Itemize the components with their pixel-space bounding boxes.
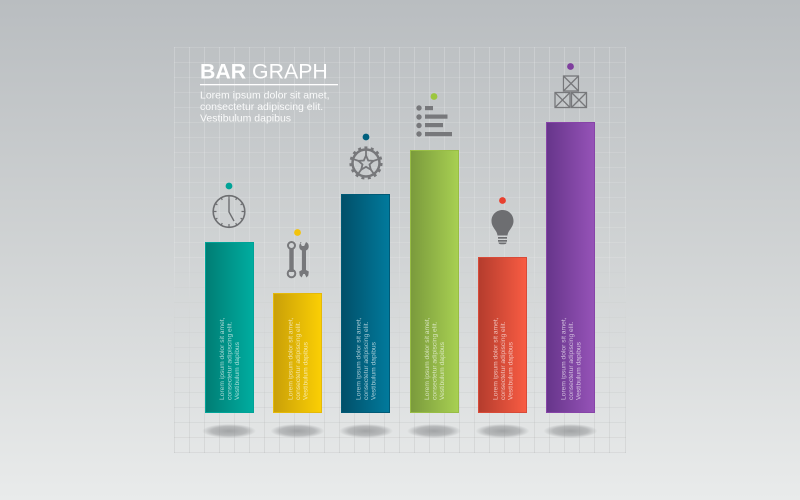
bar text <box>424 317 446 400</box>
bar text: Lorem ipsum dolor sit amet, <box>219 317 226 400</box>
shadow <box>270 424 324 438</box>
bar <box>274 294 322 412</box>
bar text <box>288 317 310 400</box>
heading: BAR GRAPH <box>200 60 328 84</box>
title block <box>200 60 338 124</box>
bar text: Lorem ipsum dolor sit amet, <box>424 317 431 400</box>
bar text: Lorem ipsum dolor sit amet, <box>288 317 294 400</box>
bar text: Lorem ipsum dolor sit amet, <box>492 317 500 400</box>
bar text: Vestibulum dapibus <box>576 341 583 400</box>
marker dot <box>499 197 506 204</box>
bar <box>410 150 458 412</box>
marker dot <box>294 229 301 236</box>
bar 2: yellow with wrenches <box>270 229 324 438</box>
marker dot <box>431 93 437 100</box>
icon: clock <box>213 196 245 227</box>
bar 6: purple with crates <box>544 63 598 438</box>
shadow <box>544 424 598 438</box>
shadow <box>202 424 256 438</box>
marker dot <box>226 183 232 189</box>
bar text <box>492 317 515 400</box>
marker dot <box>567 63 574 70</box>
shadow <box>407 424 461 438</box>
bar text: Vestibulum dapibus <box>234 341 241 400</box>
bar text: Vestibulum dapibus <box>439 341 446 400</box>
icon: light bulb <box>492 210 514 244</box>
bar text: Lorem ipsum dolor sit amet, <box>560 317 568 400</box>
icon: gear <box>351 148 381 178</box>
bar text <box>560 317 583 400</box>
bar <box>342 194 390 412</box>
bar 5: red with light bulb <box>476 197 530 438</box>
bar text: Lorem ipsum dolor sit amet, <box>356 317 362 400</box>
shadow <box>476 424 530 438</box>
intro text: consectetur adipiscing elit. <box>200 101 323 113</box>
bar text <box>356 317 378 400</box>
intro text: Vestibulum dapibus <box>200 112 291 124</box>
bar text: consectetur adipiscing elit. <box>363 321 370 400</box>
bar 3: dark blue with gear <box>339 134 393 438</box>
bar text: Vestibulum dapibus <box>508 341 515 400</box>
bar 4: green with list <box>407 93 461 438</box>
bar text: Vestibulum dapibus <box>371 341 378 400</box>
bar text: consectetur adipiscing elit. <box>432 321 439 400</box>
bar <box>478 258 526 412</box>
bar <box>206 242 254 412</box>
icon: wrenches <box>288 242 309 278</box>
bar 1: teal with clock <box>202 183 256 438</box>
bar text <box>219 317 241 400</box>
icon: list <box>416 105 452 137</box>
icon: crates <box>555 76 586 108</box>
marker dot <box>363 134 369 140</box>
bar text: consectetur adipiscing elit. <box>295 321 302 400</box>
bar <box>546 122 594 412</box>
bar text: consectetur adipiscing elit. <box>500 321 507 400</box>
intro text: Lorem ipsum dolor sit amet, <box>200 90 330 102</box>
bar text: Vestibulum dapibus <box>303 341 310 400</box>
shadow <box>339 424 393 438</box>
bar text: consectetur adipiscing elit. <box>568 321 575 400</box>
bar text: consectetur adipiscing elit. <box>227 321 234 400</box>
